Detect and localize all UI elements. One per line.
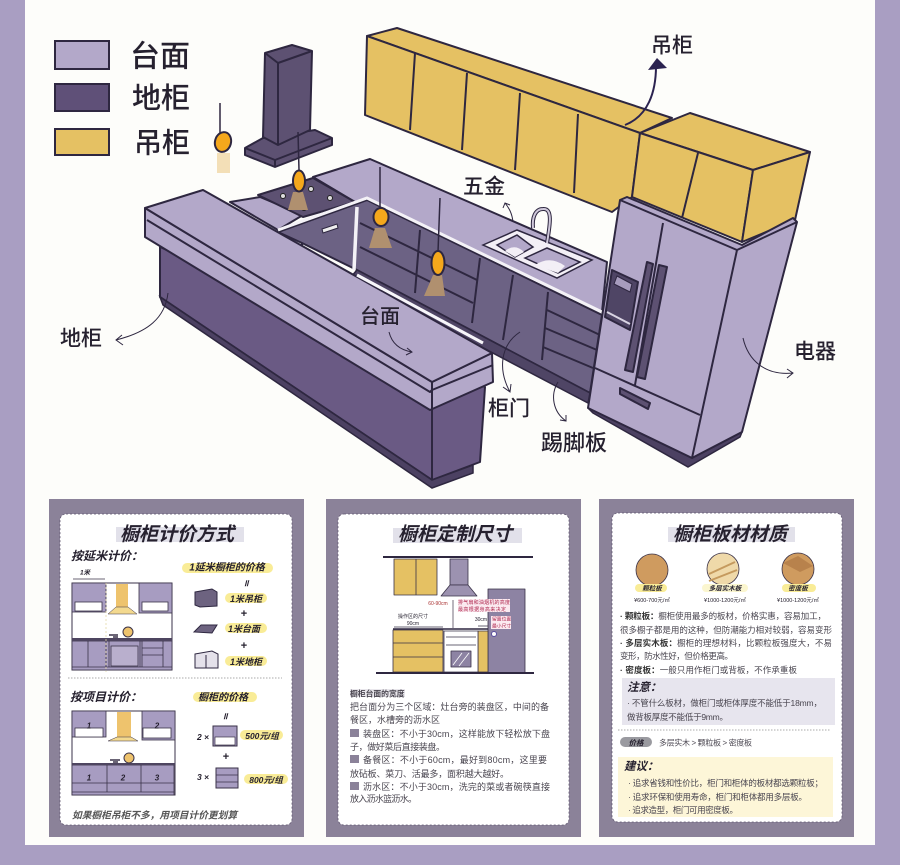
- countertop width text: 子，做好菜后直接装盘。: [350, 741, 445, 752]
- advice box: · 追求造型，柜门可用密度板。: [628, 805, 738, 815]
- kitchen illustration: [145, 28, 810, 488]
- material descriptions: 变形，防水性好，但价格更高。: [620, 651, 733, 661]
- material descriptions: · 多层实木板：橱柜的理想材料，比颗粒板强度大，不易: [620, 638, 832, 648]
- formula: price per item: ॥: [222, 711, 229, 721]
- material samples: ¥1000-1200元/㎡: [704, 596, 746, 604]
- price ranking: 多层实木 > 颗粒板 > 密度板: [659, 738, 752, 748]
- formula: price per item: 500元/组: [245, 731, 280, 741]
- upper cabinets: [365, 28, 810, 242]
- label: cabinet door: [488, 332, 530, 420]
- heading: pricing: 橱柜计价方式: [120, 524, 237, 546]
- countertop width text: [350, 688, 550, 804]
- material samples: 颗粒板: [642, 584, 663, 592]
- material samples: ¥1000-1200元/㎡: [777, 596, 819, 604]
- label: toe kick: 踢脚板: [541, 430, 607, 456]
- label: appliance: [743, 338, 836, 378]
- kitchen diagram: per item: [72, 711, 175, 795]
- material descriptions: [620, 611, 832, 675]
- by item heading: 按项目计价：: [70, 690, 142, 704]
- kitchen diagram: per item: 1: [87, 722, 92, 730]
- label: hardware: [463, 176, 513, 222]
- base cabinet fronts: [278, 198, 602, 403]
- countertop width text: 沥水区：不小于30cm，洗完的菜或者碗筷直接: [363, 781, 550, 792]
- formula: price per linear metre: 1米地柜: [230, 657, 264, 667]
- countertop width text: 放入沥水篮沥水。: [350, 793, 417, 804]
- heading: sizes: 橱柜定制尺寸: [398, 524, 515, 546]
- advice box: [618, 757, 833, 817]
- legend: 地柜: [132, 82, 190, 115]
- kitchen diagram: per item: 3: [155, 774, 160, 782]
- formula: price per item: 2 ×: [196, 732, 209, 742]
- countertop along wall: [230, 159, 607, 312]
- formula: price per item: [193, 692, 288, 788]
- formula: price per linear metre: 1米台面: [228, 624, 262, 634]
- label: toe kick: [541, 382, 607, 456]
- note box: · 不管什么板材，做柜门或柜体厚度不能低于18mm，: [627, 698, 822, 708]
- formula: price per item: 橱柜的价格: [198, 692, 249, 704]
- formula: price per item: 3 ×: [197, 772, 209, 782]
- kitchen elevation diagram: 排气扇和油烟机的高度: [458, 599, 510, 606]
- formula: price per item: 800元/组: [249, 775, 284, 785]
- advice box: · 追求环保和使用寿命，柜门和柜体都用多层板。: [628, 792, 807, 802]
- countertop width text: 餐区，水槽旁的沥水区: [350, 714, 440, 725]
- panel: pricing: [49, 499, 304, 837]
- pendant lamps: [213, 103, 445, 296]
- sink and faucet: [483, 209, 592, 278]
- countertop width text: 放砧板、菜刀、活最多，面积越大越好。: [350, 768, 509, 779]
- note box: 做背板厚度不能低于9mm。: [627, 712, 728, 722]
- legend: 吊柜: [134, 128, 190, 158]
- kitchen diagram: per item: 2: [120, 774, 126, 782]
- formula: price per linear metre: +: [241, 608, 247, 620]
- kitchen elevation diagram: 最高根据身高来决定: [458, 606, 506, 613]
- kitchen elevation diagram: 90cm: [407, 621, 419, 627]
- kitchen elevation diagram: 操作区的尺寸: [398, 613, 428, 620]
- kitchen diagram: per item: 2: [154, 722, 160, 730]
- kitchen elevation diagram: [376, 557, 534, 673]
- refrigerator: [588, 197, 797, 467]
- material samples: 多层实木板: [709, 584, 743, 592]
- label: countertop: 台面: [360, 305, 400, 328]
- heading: materials: 橱柜板材材质: [673, 524, 790, 546]
- material samples: ¥600-700元/㎡: [634, 596, 670, 604]
- legend: 台面: [130, 40, 190, 74]
- island cabinet: [145, 190, 493, 488]
- material descriptions: · 密度板：一般只用作柜门或背板，不作承重板: [620, 665, 797, 675]
- kitchen diagram: linear metre: [72, 568, 172, 672]
- formula: price per linear metre: 1米吊柜: [230, 594, 264, 604]
- panel: custom sizes: [326, 499, 581, 837]
- kitchen elevation diagram: 30cm: [475, 617, 487, 623]
- material descriptions: · 颗粒板：橱柜使用最多的板材，价格实惠，容易加工，: [620, 611, 826, 621]
- formula: price per linear metre: ॥: [243, 578, 250, 588]
- footnote: 如果橱柜吊柜不多，用项目计价更划算: [72, 810, 239, 822]
- countertop width text: 备餐区：不小于60cm，最好到80cm，这里要: [363, 754, 547, 765]
- label: cabinet door: 柜门: [488, 398, 530, 420]
- label: appliance: 电器: [794, 340, 836, 364]
- legend: [55, 40, 190, 158]
- countertop width text: 装盘区：不小于30cm，这样能放下轻松放下盘: [363, 728, 550, 739]
- label: countertop: [360, 305, 412, 355]
- advice box: 建议：: [624, 760, 658, 773]
- label: upper cabinet: [625, 34, 693, 125]
- range hood: [245, 45, 332, 167]
- panel: board materials: [599, 499, 854, 837]
- label: base cabinet: 地柜: [60, 328, 102, 350]
- kitchen elevation diagram: 60-90cm: [428, 601, 448, 607]
- formula: price per item: +: [223, 751, 229, 763]
- kitchen diagram: linear metre: 1米: [80, 568, 92, 576]
- note box: [622, 678, 835, 725]
- countertop width text: 橱柜台面的宽度: [350, 688, 405, 698]
- by linear metre heading: 按延米计价：: [71, 549, 143, 563]
- kitchen elevation diagram: 最小尺寸: [492, 622, 511, 630]
- material samples: 密度板: [788, 584, 809, 592]
- label: base cabinet: [60, 293, 168, 350]
- material samples: [634, 553, 819, 604]
- price ranking: [620, 737, 752, 748]
- formula: price per linear metre: 1延米橱柜的价格: [189, 562, 266, 574]
- material descriptions: 很多橱子都是用的这种，但防潮能力相对较弱，容易变形: [620, 625, 832, 635]
- countertop width text: 把台面分为三个区域：灶台旁的装盘区，中间的备: [350, 701, 549, 712]
- label: hardware: 五金: [463, 176, 505, 198]
- advice box: · 追求省钱和性价比，柜门和柜体的板材都选颗粒板；: [628, 778, 823, 788]
- kitchen elevation diagram: 留置位置: [492, 616, 511, 622]
- price ranking: 价格: [628, 738, 645, 748]
- formula: price per linear metre: [182, 562, 273, 668]
- kitchen diagram: per item: 1: [87, 774, 92, 782]
- formula: price per linear metre: +: [241, 640, 247, 652]
- label: upper cabinet: 吊柜: [651, 34, 693, 58]
- note box: 注意：: [627, 681, 662, 694]
